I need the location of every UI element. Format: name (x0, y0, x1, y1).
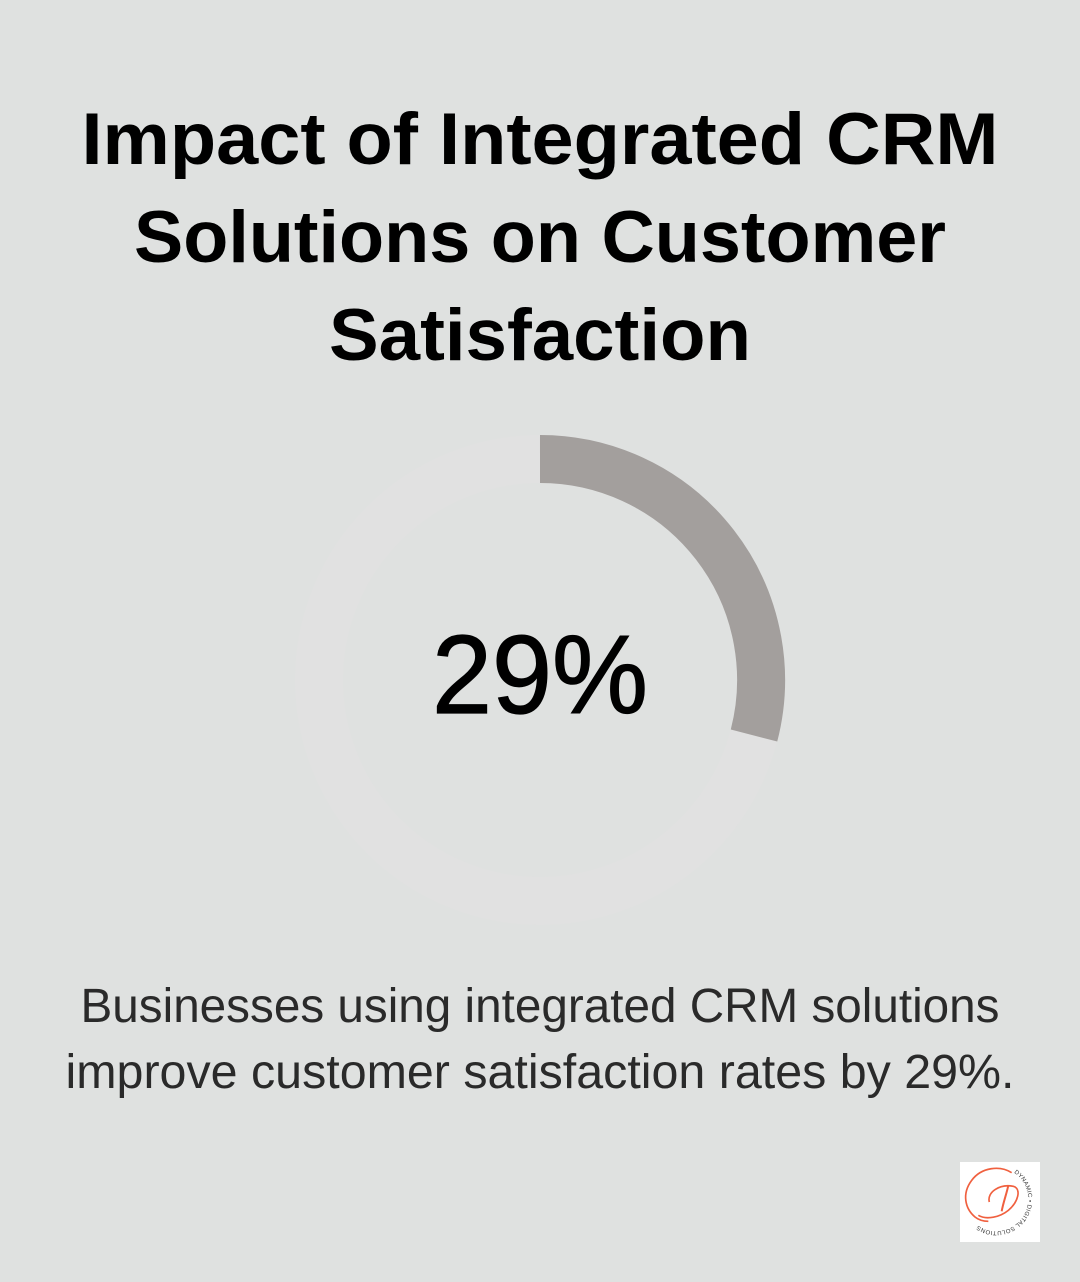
logo: Dynamic Digital Solutions (960, 1162, 1040, 1242)
center value: 29% (432, 613, 648, 737)
title: Satisfaction (329, 295, 751, 376)
title (82, 99, 998, 376)
title: Impact of Integrated CRM (82, 99, 998, 180)
description text: improve customer satisfaction rates by 29%. (66, 1046, 1015, 1099)
title: Solutions on Customer (134, 197, 946, 278)
description text: Businesses using integrated CRM solutions (80, 980, 1000, 1033)
donut value arc (540, 459, 761, 736)
donut chart: 29% (319, 459, 761, 901)
donut track (319, 459, 761, 901)
description text (66, 980, 1015, 1099)
logo mark: DYNAMIC • DIGITAL SOLUTIONS (976, 1170, 1032, 1236)
logo background (960, 1162, 1040, 1242)
